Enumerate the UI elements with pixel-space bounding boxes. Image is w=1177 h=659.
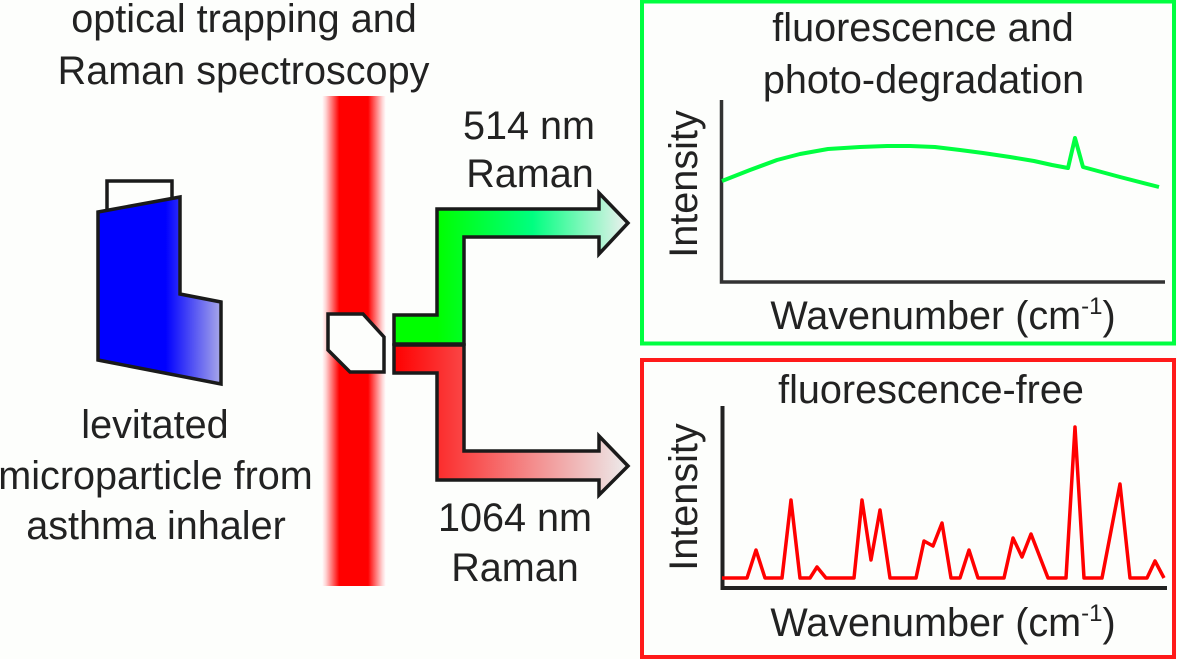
label: 514 nm Raman — [463, 104, 595, 196]
panel: fluorescence-free — [642, 360, 1174, 657]
panel title — [763, 6, 1084, 102]
panel title: photo-degradation — [763, 58, 1084, 102]
panel: fluorescence and photo-degradation — [642, 2, 1174, 344]
axes — [722, 406, 1167, 588]
y axis label: Intensity — [662, 423, 706, 571]
icon: asthma inhaler — [98, 181, 221, 384]
axes — [722, 100, 1165, 282]
heading: optical trapping — [58, 0, 430, 93]
label: levitated microparticle: microparticle from — [0, 454, 313, 498]
label: levitated microparticle: asthma inhaler — [26, 504, 286, 548]
red spectrum line — [722, 427, 1164, 578]
label: 1064 nm Raman: 1064 nm — [438, 496, 592, 540]
y axis label: Intensity — [662, 110, 706, 258]
label: 1064 nm Raman: Raman — [451, 546, 579, 590]
arrow: 1064 nm red — [394, 345, 628, 495]
x axis label: ) — [1102, 294, 1116, 338]
label: 514 nm Raman: 514 nm — [463, 104, 595, 148]
panel title: fluorescence and — [772, 6, 1074, 50]
green spectrum line — [722, 138, 1159, 187]
panel title: fluorescence-free — [778, 368, 1084, 412]
heading: optical trapping: Raman spectroscopy — [58, 49, 430, 93]
label: levitated microparticle: levitated — [81, 403, 229, 447]
x axis label: ) — [1102, 601, 1116, 645]
label: 1064 nm Raman — [438, 496, 592, 590]
laser beam — [322, 96, 386, 586]
arrow: 514 nm green — [394, 193, 628, 344]
microparticle — [328, 314, 384, 372]
label: levitated microparticle — [0, 403, 313, 548]
x axis label: -1 — [1081, 600, 1102, 627]
x axis label: -1 — [1081, 293, 1102, 320]
x axis label: Wavenumber (cm — [770, 294, 1081, 338]
x axis label: Wavenumber (cm — [770, 601, 1081, 645]
label: 514 nm Raman: Raman — [466, 152, 594, 196]
